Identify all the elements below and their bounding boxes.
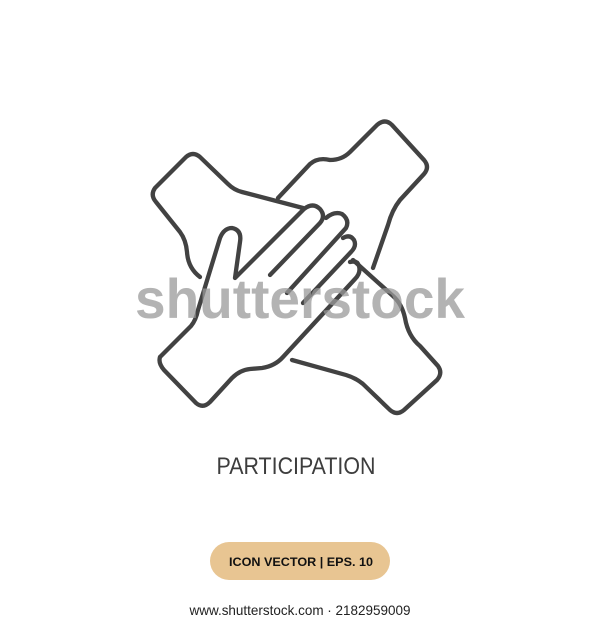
hand: top-right arm: [278, 122, 427, 268]
badge pill: ICON VECTOR | EPS. 10: [229, 555, 373, 569]
hand: top-left arm: [153, 154, 303, 277]
watermark: shutterstock: [135, 267, 466, 330]
footer: www.shutterstock.com · 2182959009: [189, 602, 411, 618]
badge pill: [210, 542, 390, 580]
title: PARTICIPATION: [216, 453, 376, 480]
icon: stacked hands: [153, 122, 440, 413]
hand: bottom-right arm: [292, 260, 440, 413]
hand: front hand with fingers: [160, 206, 360, 406]
